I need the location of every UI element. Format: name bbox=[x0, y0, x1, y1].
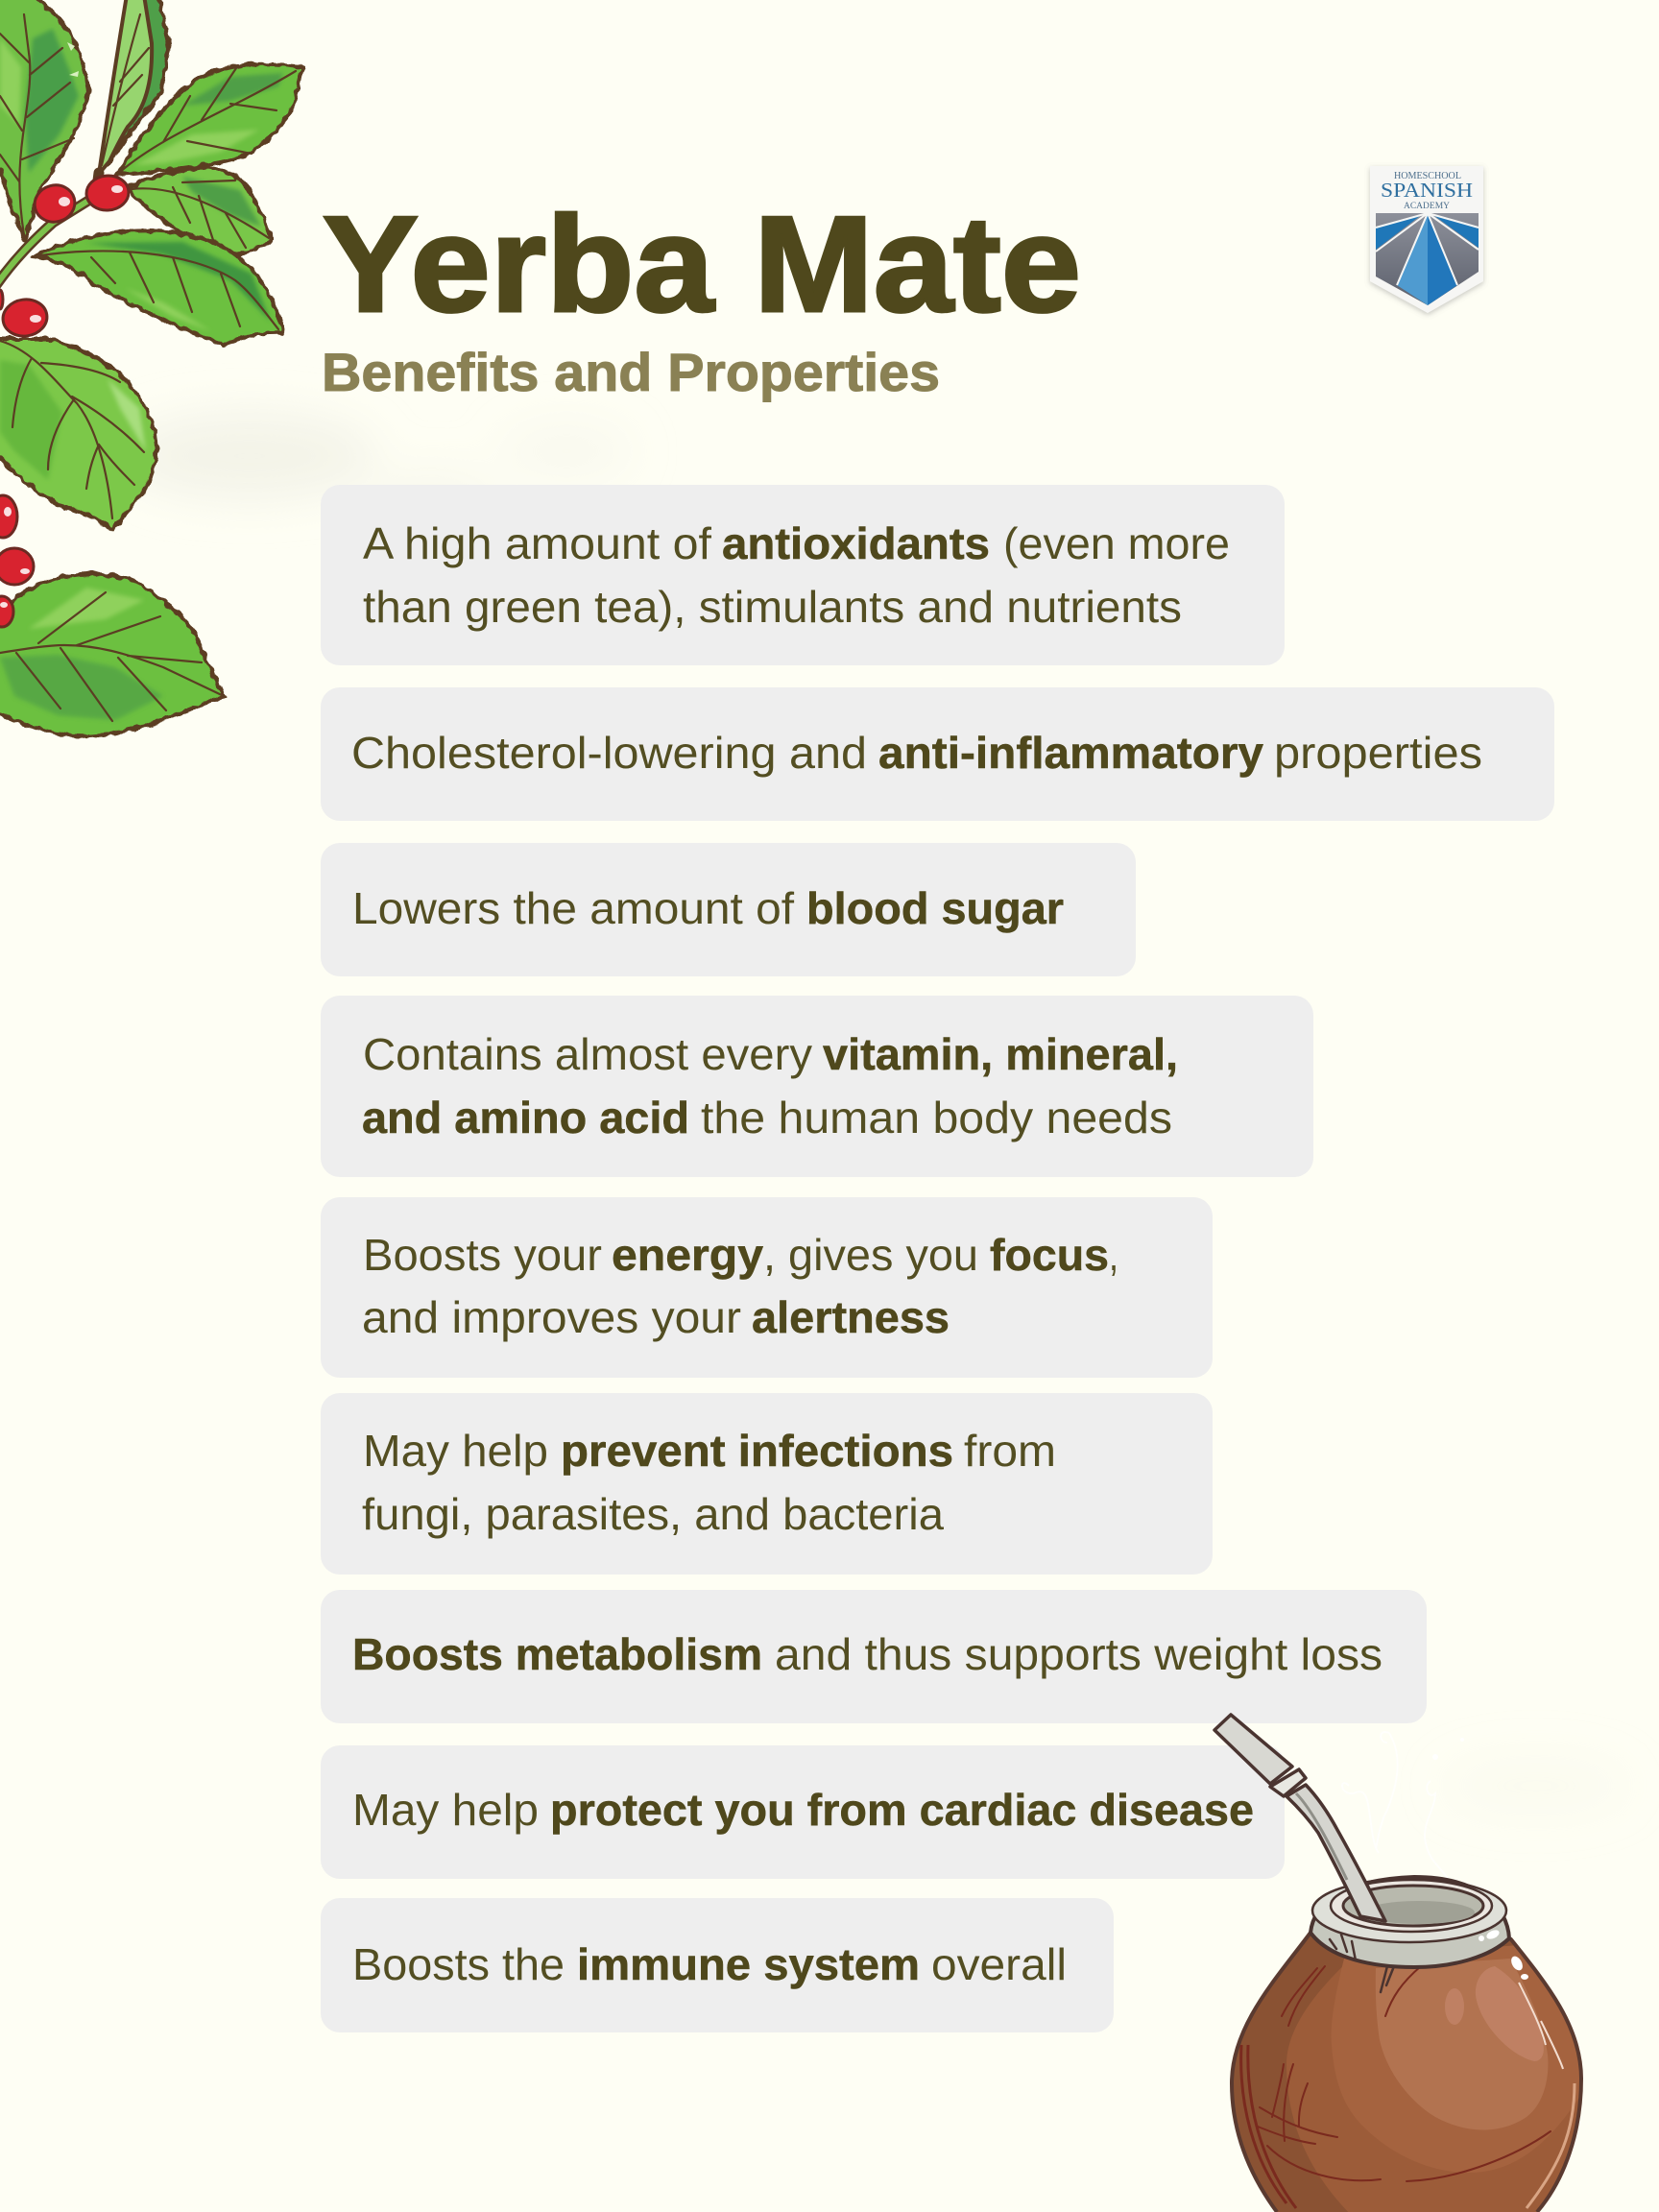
logo: Homeschool Spanish Academy shield: HOMESCHOOL bbox=[1394, 171, 1461, 181]
berry highlights bbox=[0, 185, 123, 608]
bombilla straw bbox=[1214, 1715, 1385, 1921]
leaf: top left bbox=[0, 0, 88, 240]
card 6: infections: prevent infections bbox=[561, 1426, 953, 1476]
title: Yerba Mate bbox=[323, 188, 1081, 341]
gourd metal rim bbox=[1310, 1877, 1509, 1992]
illustration: mate gourd with bombilla bbox=[1214, 1715, 1594, 2212]
card 2: anti-inflammatory: Cholesterol-lowering and bbox=[351, 728, 867, 778]
card 9: immune system: immune system bbox=[577, 1939, 920, 1989]
card 9: immune system bbox=[321, 1898, 1114, 2032]
card 3: blood sugar: Lowers the amount of bbox=[352, 883, 794, 933]
card 6: infections: from bbox=[964, 1426, 1056, 1476]
card 2: anti-inflammatory: properties bbox=[1274, 728, 1482, 778]
card 6: infections bbox=[321, 1393, 1213, 1575]
logo: Homeschool Spanish Academy shield: SPANISH bbox=[1381, 179, 1473, 202]
card 4: vitamins: the human body needs bbox=[701, 1093, 1172, 1142]
card 4: vitamins: and amino acid bbox=[362, 1093, 689, 1142]
logo: Homeschool Spanish Academy shield: ACADEMY bbox=[1404, 201, 1451, 210]
card 2: anti-inflammatory bbox=[321, 687, 1554, 821]
card 4: vitamins: vitamin, mineral, bbox=[823, 1029, 1178, 1079]
leaf: bottom bbox=[0, 574, 224, 736]
leaf: middle right bbox=[130, 167, 273, 254]
stem highlight bbox=[0, 196, 96, 285]
card 5: energy bbox=[321, 1197, 1213, 1378]
card 6: infections: fungi, parasites, and bacteria bbox=[362, 1489, 944, 1539]
card 2: anti-inflammatory: anti-inflammatory bbox=[878, 728, 1263, 778]
card 5: energy: Boosts your bbox=[363, 1230, 602, 1280]
illustration: yerba mate branch with leaves and berries bbox=[0, 0, 302, 736]
card 5: energy: , gives you bbox=[763, 1230, 978, 1280]
card 5: energy: , bbox=[1109, 1230, 1118, 1280]
leaf: long middle bbox=[32, 230, 284, 345]
subtitle: Benefits and Properties bbox=[322, 342, 940, 402]
card 1: antioxidants: A high amount of bbox=[363, 518, 711, 568]
leaf: top centre bbox=[99, 0, 169, 174]
card 7: metabolism: and thus supports weight loss bbox=[775, 1629, 1382, 1679]
card 1: antioxidants: (even more bbox=[1003, 518, 1230, 568]
card 5: energy: and improves your bbox=[362, 1292, 741, 1342]
card 5: energy: alertness bbox=[752, 1292, 950, 1342]
card 5: energy: energy bbox=[612, 1230, 763, 1280]
leaf: large centre bbox=[0, 339, 156, 530]
logo: Homeschool Spanish Academy shield bbox=[1370, 166, 1483, 313]
card 1: antioxidants bbox=[321, 485, 1285, 665]
berries bbox=[0, 174, 130, 627]
card 3: blood sugar: blood sugar bbox=[806, 883, 1064, 933]
card 4: vitamins bbox=[321, 996, 1313, 1177]
card 7: metabolism: Boosts metabolism bbox=[352, 1629, 762, 1679]
card 1: antioxidants: antioxidants bbox=[722, 518, 990, 568]
card 4: vitamins: Contains almost every bbox=[363, 1029, 812, 1079]
card 8: cardiac disease bbox=[321, 1745, 1285, 1879]
card 9: immune system: Boosts the bbox=[352, 1939, 565, 1989]
stem bbox=[0, 173, 99, 285]
leaf: upper right bbox=[117, 64, 302, 175]
card 3: blood sugar bbox=[321, 843, 1136, 976]
card 8: cardiac disease: May help bbox=[352, 1785, 539, 1835]
card 8: cardiac disease: protect you from cardiac disease bbox=[550, 1785, 1254, 1835]
card 6: infections: May help bbox=[363, 1426, 548, 1476]
card 7: metabolism bbox=[321, 1590, 1427, 1723]
gourd body bbox=[1232, 1933, 1594, 2212]
card 5: energy: focus bbox=[990, 1230, 1109, 1280]
card 1: antioxidants: than green tea), stimulants and nutrients bbox=[363, 582, 1182, 632]
steam wisps bbox=[1342, 1732, 1464, 1899]
card 9: immune system: overall bbox=[931, 1939, 1067, 1989]
